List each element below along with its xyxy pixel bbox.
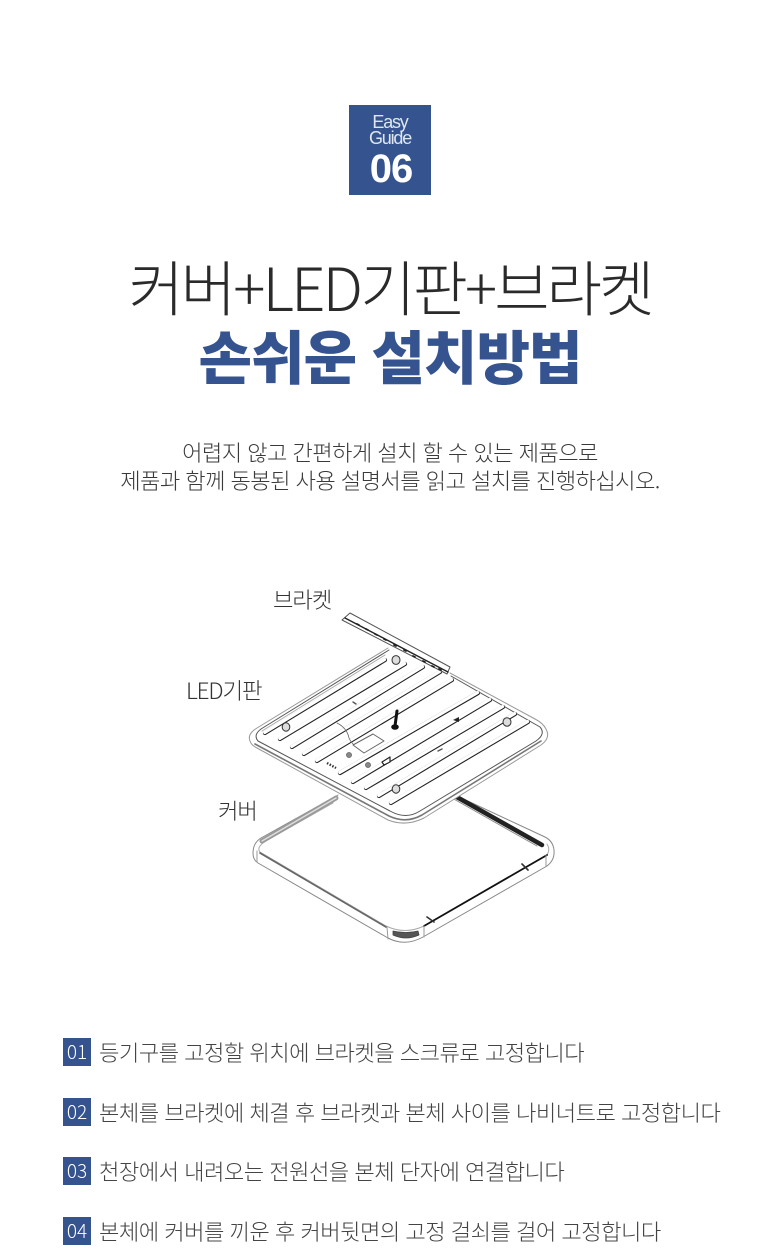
LED strips [265, 660, 528, 803]
badge: Easy Guide 06 [349, 105, 431, 195]
label: LED board: LED기판 [186, 673, 262, 706]
step 02 number: 02 [67, 1098, 87, 1125]
wire and connector [337, 723, 358, 747]
bracket [342, 613, 450, 674]
step 03 text: 천장에서 내려오는 전원선을 본체 단자에 연결합니다 [99, 1155, 564, 1187]
badge: Easy Guide 06: 06 [370, 147, 412, 191]
label: cover: 커버 [218, 794, 257, 826]
exploded product diagram [248, 612, 555, 943]
title: light line: 커버+LED기판+브라켓 [128, 242, 652, 329]
LED board panel [249, 648, 548, 823]
badge: Easy Guide 06: Easy [372, 112, 408, 132]
step 04 number: 04 [67, 1217, 87, 1244]
step 03 number: 03 [67, 1157, 87, 1184]
badge: Easy Guide 06: Guide [369, 128, 411, 148]
description text: 어렵지 않고 간편하게 설치 할 수 있는 제품으로 [182, 436, 598, 468]
description text [120, 436, 660, 496]
step 01 text: 등기구를 고정할 위치에 브라켓을 스크류로 고정합니다 [99, 1036, 584, 1068]
label: bracket: 브라켓 [273, 583, 331, 615]
step 04 text: 본체에 커버를 끼운 후 커버뒷면의 고정 걸쇠를 걸어 고정합니다 [99, 1215, 661, 1247]
step 02 text: 본체를 브라켓에 체결 후 브라켓과 본체 사이를 나비너트로 고정합니다 [99, 1096, 720, 1128]
description text: 제품과 함께 동봉된 사용 설명서를 읽고 설치를 진행하십시오. [120, 464, 660, 496]
step 01 number: 01 [67, 1038, 87, 1065]
mounting posts [282, 656, 511, 793]
cover frame [253, 795, 554, 942]
title: bold line: 손쉬운 설치방법 [198, 311, 582, 396]
